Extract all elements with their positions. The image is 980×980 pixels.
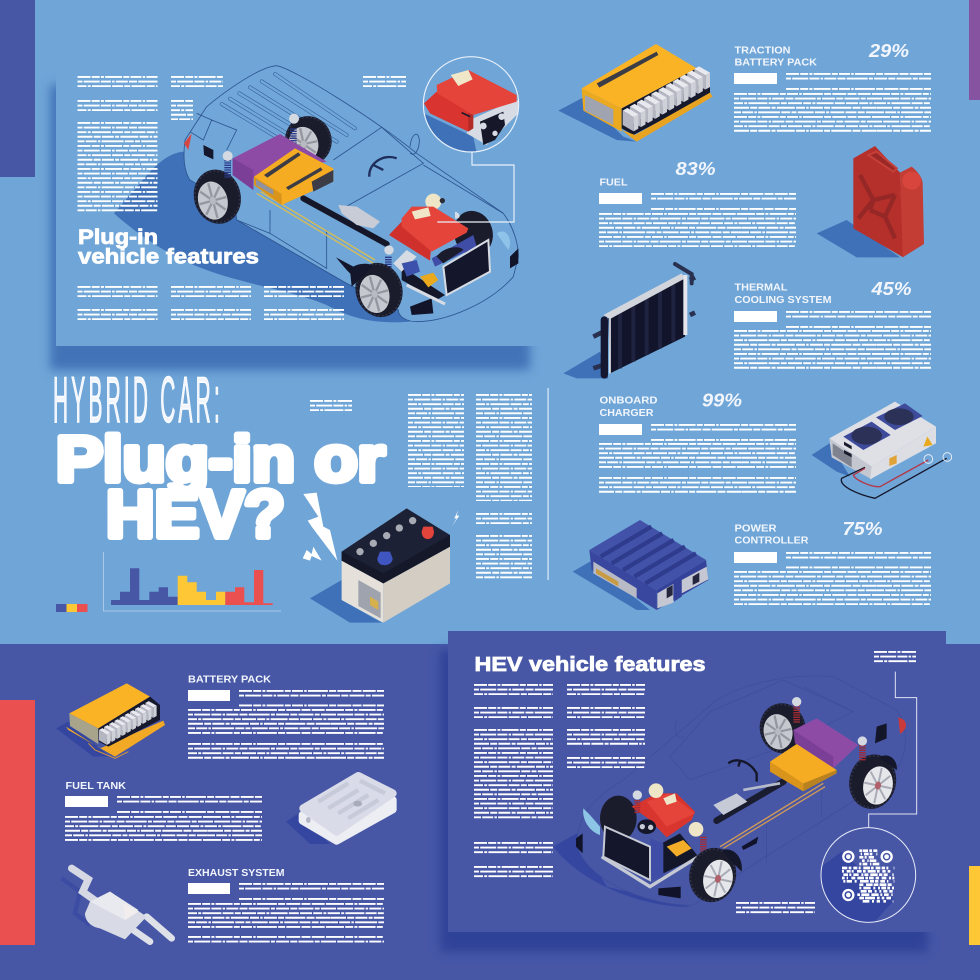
accent block: top right purple — [969, 0, 980, 100]
heading: battery pack: BATTERY PACK — [188, 673, 271, 685]
text: exhaust body — [188, 883, 384, 943]
panel: plug-in vehicle features — [50, 57, 546, 370]
percentage: 75%: 75% — [842, 519, 882, 539]
text blocks: title section — [310, 394, 532, 580]
icon: small battery pack — [56, 683, 165, 758]
accent block: top left — [0, 0, 35, 177]
title block — [53, 363, 385, 552]
heading: onboard charger: ONBOARD — [600, 394, 658, 406]
icon: fuel tank — [286, 776, 393, 844]
heading: traction battery pack — [734, 44, 817, 69]
section: fuel tank — [65, 776, 393, 844]
text: charger body — [599, 424, 796, 493]
divider — [548, 388, 549, 580]
section: exhaust system — [62, 867, 384, 943]
heading: thermal cooling system — [734, 282, 832, 306]
QR code — [842, 851, 894, 901]
text: fuel tank body — [65, 796, 262, 841]
icon: car battery with lightning — [303, 493, 459, 623]
text: fuel body — [599, 193, 796, 247]
section: fuel — [599, 146, 924, 257]
section: traction battery pack — [558, 41, 931, 142]
heading: HEV vehicle features: HEV vehicle features — [474, 654, 706, 676]
section: thermal cooling system — [563, 264, 931, 378]
text: thermal body — [734, 311, 931, 369]
heading: traction battery pack: BATTERY PACK — [734, 57, 817, 69]
heading: onboard charger — [600, 394, 658, 419]
dark lower band — [0, 644, 980, 980]
icon: exhaust — [62, 868, 172, 942]
illustration: HEV car chassis — [553, 676, 906, 907]
icon: traction battery — [558, 44, 713, 142]
percentage: 99%: 99% — [702, 391, 742, 411]
callout: QR code circle — [817, 672, 917, 923]
accent block: yellow — [969, 866, 980, 945]
icon: power controller — [573, 520, 708, 610]
heading: plug-in vehicle features: vehicle features — [78, 246, 259, 268]
heading: plug-in vehicle features: Plug-in — [78, 226, 158, 249]
heading: fuel tank: FUEL TANK — [66, 780, 126, 792]
icon: onboard charger — [812, 402, 952, 498]
text: traction battery body — [734, 73, 931, 132]
title line: HEV?: HEV? — [106, 477, 285, 552]
text: controller body — [734, 552, 931, 605]
illustration: plug-in car chassis — [114, 66, 518, 322]
section: battery pack — [56, 673, 384, 759]
text blocks: HEV panel — [474, 651, 916, 914]
heading: power controller: POWER — [734, 523, 777, 535]
callout: engine zoom circle — [423, 57, 520, 222]
bar chart — [104, 552, 281, 611]
panel: HEV vehicle features — [440, 631, 946, 952]
icon: radiator — [563, 264, 695, 378]
heading: onboard charger: CHARGER — [600, 407, 654, 419]
accent block: red — [0, 700, 35, 945]
heading: power controller: CONTROLLER — [734, 534, 809, 546]
percentage: 29%: 29% — [868, 41, 909, 61]
text blocks: plug-in panel — [78, 76, 406, 320]
icon: jerry can — [817, 146, 924, 257]
heading: fuel: FUEL — [600, 177, 628, 189]
heading: thermal cooling system: THERMAL — [734, 282, 788, 294]
heading: plug-in vehicle features — [78, 226, 259, 268]
percentage: 83%: 83% — [676, 159, 716, 179]
title line: Plug-in or: Plug-in or — [56, 423, 385, 495]
heading: traction battery pack: TRACTION — [734, 44, 790, 56]
title block: HYBRID CAR: — [53, 363, 223, 436]
heading: thermal cooling system: COOLING SYSTEM — [734, 294, 832, 306]
chart legend — [56, 604, 88, 612]
heading: power controller — [734, 523, 809, 546]
percentage: 45%: 45% — [870, 279, 912, 299]
text: battery pack body — [188, 690, 384, 759]
heading: exhaust system: EXHAUST SYSTEM — [188, 867, 285, 879]
light corner block above HEV panel — [946, 631, 980, 644]
section: power controller — [573, 519, 931, 610]
section: onboard charger — [599, 391, 952, 498]
